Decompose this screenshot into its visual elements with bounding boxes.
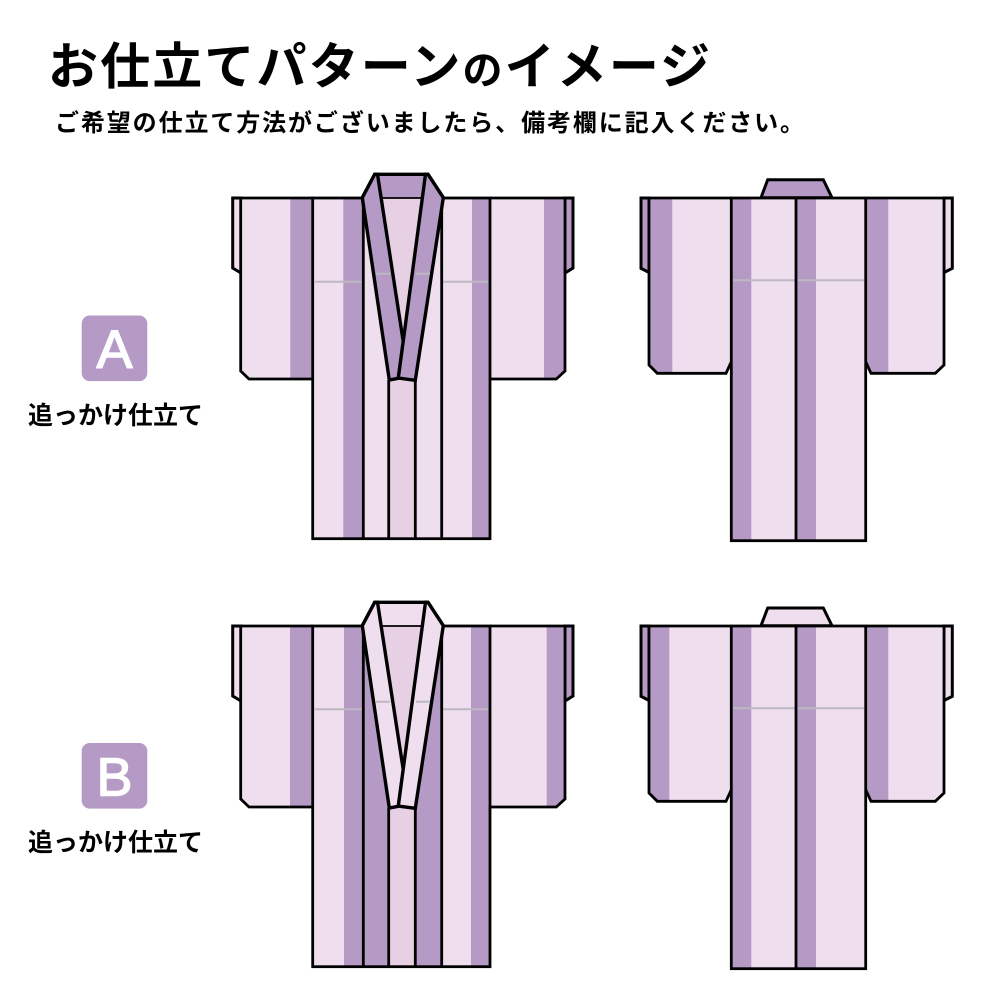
kimono A back bbox=[641, 180, 952, 541]
label B: 追っかけ仕立て: 追っかけ仕立て bbox=[28, 829, 203, 857]
badge A: A bbox=[96, 320, 133, 380]
kimono A front bbox=[233, 174, 573, 539]
back collar bbox=[761, 180, 832, 198]
label A: 追っかけ仕立て: 追っかけ仕立て bbox=[28, 402, 203, 430]
title: お仕立てパターンのイメージ bbox=[48, 39, 710, 95]
badge B bbox=[82, 743, 147, 809]
collar bbox=[362, 602, 443, 808]
left sleeve bbox=[233, 626, 313, 807]
body bbox=[731, 626, 866, 969]
badge A bbox=[82, 316, 147, 381]
kimono B back bbox=[641, 608, 952, 969]
back collar bbox=[761, 608, 832, 626]
left sleeve bbox=[641, 626, 731, 801]
kimono B front bbox=[233, 602, 573, 967]
right sleeve bbox=[866, 626, 952, 801]
collar bbox=[362, 174, 443, 380]
body bbox=[313, 198, 490, 539]
subtitle: ご希望の仕立て方法がございましたら、備考欄に記入ください。 bbox=[55, 109, 804, 137]
badge B: B bbox=[96, 748, 133, 808]
left sleeve bbox=[233, 198, 313, 379]
body bbox=[731, 198, 866, 541]
right sleeve bbox=[490, 626, 573, 807]
body bbox=[313, 626, 490, 967]
right sleeve bbox=[866, 198, 952, 373]
right sleeve bbox=[490, 198, 573, 379]
left sleeve bbox=[641, 198, 731, 373]
